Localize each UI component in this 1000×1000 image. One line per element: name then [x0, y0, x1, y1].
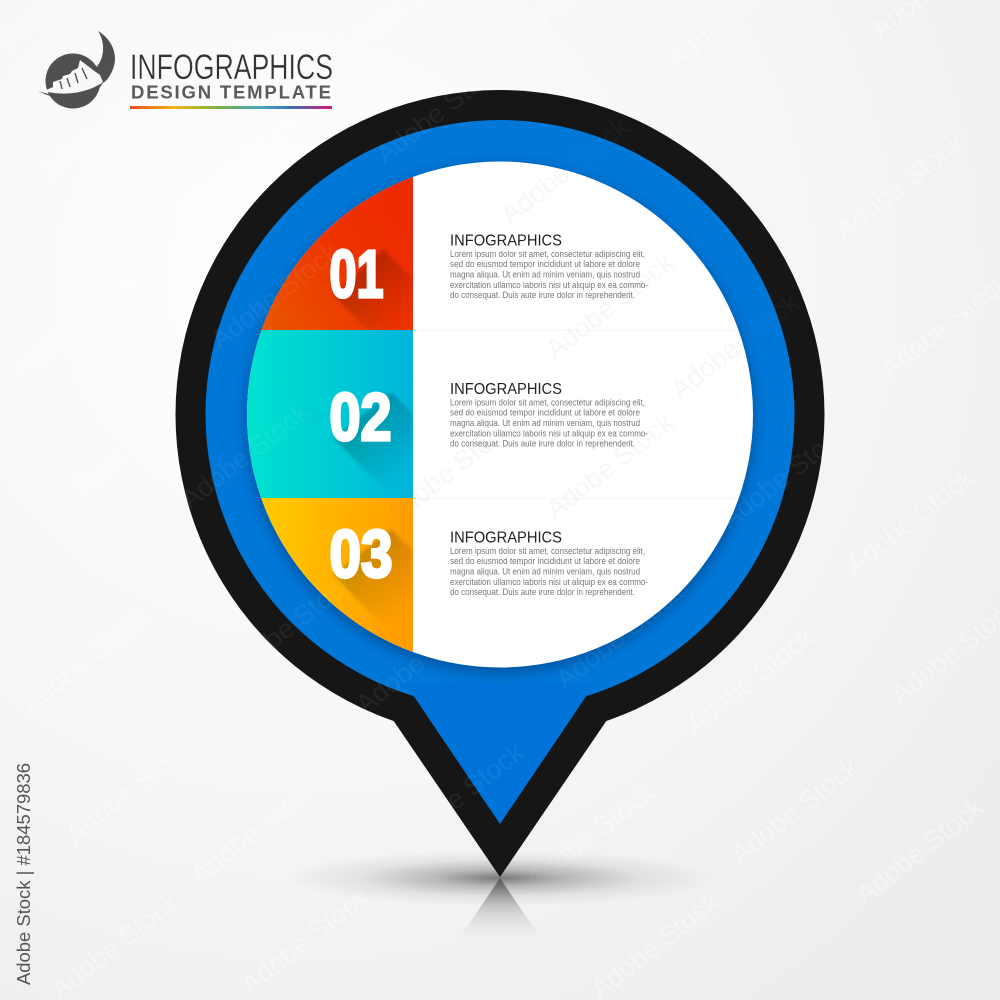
pin watermark: [175, 52, 855, 855]
body 2: exercitation ullamco laboris nisi ut aliquip ex ea commo-: [450, 428, 648, 438]
text block 2: [450, 381, 648, 448]
stock id label: Adobe Stock | #184579836: [13, 763, 34, 985]
body 3: Lorem ipsum dolor sit amet, consectetur adipiscing elit,: [450, 546, 645, 556]
body 1: [450, 249, 648, 300]
pin inner blue shape: [206, 120, 794, 824]
map pin: [176, 90, 824, 877]
pin watermark: Adobe Stock: [550, 577, 690, 695]
watermark: Adobe Stock: [35, 67, 175, 185]
disc shadow: [246, 165, 754, 673]
segment 03 colour: [261, 498, 413, 652]
watermark: Adobe Stock: [15, 602, 155, 720]
body 3: magna aliqua. Ut enim ad minim veniam, quis nostrud: [450, 566, 640, 576]
logo: [38, 31, 333, 109]
watermark: Adobe Stock: [520, 777, 660, 895]
watermark: Adobe Stock: [680, 622, 820, 740]
watermark: Adobe Stock: [185, 772, 325, 890]
pin watermark: Adobe Stock: [350, 602, 490, 720]
segment 01: [262, 177, 414, 330]
segment 03: [261, 498, 414, 652]
body 1: Lorem ipsum dolor sit amet, consectetur adipiscing elit,: [450, 249, 645, 259]
heading 1: INFOGRAPHICS: [450, 232, 562, 250]
pin outer black shape: [176, 90, 824, 877]
pin watermark: Adobe Stock: [540, 247, 680, 365]
body 1: exercitation ullamco laboris nisi ut aliquip ex ea commo-: [450, 280, 648, 290]
pin watermark: Adobe Stock: [380, 412, 520, 530]
body 2: do consequat. Duis aute irure dolor in reprehenderit.: [450, 438, 635, 448]
watermark: Adobe Stock: [165, 107, 305, 225]
pin watermark: Adobe Stock: [540, 407, 680, 525]
body 3: [450, 546, 648, 597]
logo title: INFOGRAPHICS: [130, 48, 333, 87]
heading 2: INFOGRAPHICS: [450, 381, 562, 398]
segment 03 number shadow: [332, 528, 414, 618]
pin watermark: Adobe Stock: [495, 112, 635, 230]
body 1: sed do eiusmod tempor incididunt ut labore et dolore: [450, 259, 640, 269]
watermark: Adobe Stock: [830, 127, 970, 245]
segment 01 number: 01: [330, 237, 384, 312]
segment 03 number: 03: [330, 517, 392, 592]
logo subtitle: DESIGN TEMPLATE: [131, 82, 331, 102]
body 1: do consequat. Duis aute irure dolor in reprehenderit.: [450, 290, 635, 300]
body 2: [450, 398, 648, 448]
segment 02: [247, 330, 413, 498]
logo icon: [38, 31, 115, 108]
body 1: magna aliqua. Ut enim ad minim veniam, quis nostrud: [450, 270, 640, 280]
pin watermark: Adobe Stock: [370, 52, 510, 170]
body 2: magna aliqua. Ut enim ad minim veniam, quis nostrud: [450, 418, 640, 428]
text block 1: [450, 232, 648, 300]
white disc: [247, 162, 753, 668]
tip reflection: [455, 878, 545, 945]
body 2: Lorem ipsum dolor sit amet, consectetur adipiscing elit,: [450, 398, 645, 408]
row divider lines: [413, 330, 737, 498]
pin watermark: Adobe Stock: [390, 737, 530, 855]
ground shadow: [285, 850, 715, 906]
body 2: sed do eiusmod tempor incididunt ut labore et dolore: [450, 408, 640, 418]
segment 01 colour: [262, 177, 413, 330]
pin watermark: Adobe Stock: [175, 397, 315, 515]
body 3: do consequat. Duis aute irure dolor in reprehenderit.: [450, 587, 635, 597]
rainbow rule: [130, 106, 332, 109]
watermark: Adobe Stock: [50, 397, 190, 515]
segment 02 colour: [247, 330, 413, 498]
segment 01 number shadow: [333, 249, 413, 330]
watermark: Adobe Stock: [725, 752, 865, 870]
pin watermark: Adobe Stock: [220, 567, 360, 685]
watermark: Adobe Stock: [235, 882, 375, 1000]
watermark: Adobe Stock: [850, 792, 990, 910]
body 3: exercitation ullamco laboris nisi ut aliquip ex ea commo-: [450, 577, 648, 587]
pin watermark: Adobe Stock: [715, 417, 855, 535]
watermark: Adobe Stock: [840, 462, 980, 580]
pin watermark: Adobe Stock: [205, 237, 345, 355]
segment 02 number shadow: [333, 392, 414, 481]
watermark: Adobe Stock: [60, 732, 200, 850]
segment 02 number: 02: [330, 380, 392, 455]
body 3: sed do eiusmod tempor incididunt ut labore et dolore: [450, 556, 640, 566]
heading 3: INFOGRAPHICS: [450, 530, 562, 546]
pin watermark: Adobe Stock: [665, 287, 805, 405]
text block 3: [450, 530, 648, 597]
watermark: Adobe Stock: [5, 267, 145, 385]
